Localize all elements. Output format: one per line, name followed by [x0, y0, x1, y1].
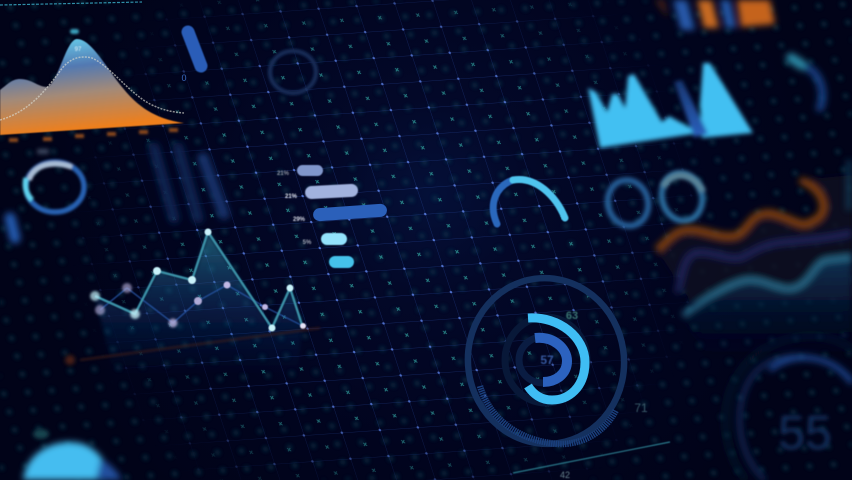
- inner arc: [535, 338, 567, 382]
- bar labels: 29%: [293, 217, 306, 223]
- ring one: [603, 176, 653, 230]
- left ring: [25, 162, 84, 212]
- axis value: 42: [560, 470, 570, 480]
- bar 2: [305, 184, 358, 199]
- ring two: [656, 169, 708, 225]
- bar labels: 5%: [303, 240, 312, 246]
- teal line: [683, 257, 852, 315]
- lower teal axis line: [513, 442, 670, 473]
- wave chart: [657, 175, 852, 380]
- small rings: [603, 169, 708, 230]
- bar 3: [313, 203, 387, 222]
- dashed top line: [0, 2, 142, 5]
- bar labels: [277, 171, 312, 246]
- blurred pills: [10, 148, 224, 238]
- axis markers: [9, 128, 178, 142]
- purple line: [677, 233, 852, 293]
- main donut: [457, 268, 648, 454]
- pill value: 0: [181, 73, 187, 83]
- donut values: 63: [566, 310, 578, 322]
- ring label: [37, 149, 49, 154]
- bottom left donut: [23, 442, 122, 480]
- orange marker: [65, 355, 75, 365]
- ring two highlight: [663, 176, 703, 192]
- gauge arc: [493, 179, 565, 224]
- donut values: 57: [540, 353, 554, 367]
- donut values: 71: [634, 401, 648, 415]
- top right arc: [791, 58, 822, 108]
- gauge value: 55: [778, 407, 832, 460]
- far right glow: [846, 160, 852, 210]
- bar labels: 21%: [277, 171, 290, 177]
- bar 4: [321, 233, 347, 245]
- horizontal bar chart: [277, 165, 387, 268]
- bottom right gauge: [725, 336, 852, 480]
- secondary points: [95, 282, 306, 329]
- chart peak label: 97: [75, 47, 82, 53]
- bar 5: [329, 256, 354, 268]
- line chart: [90, 228, 306, 400]
- cyan histogram: [588, 63, 753, 148]
- data points: [90, 228, 294, 332]
- dark ring: [270, 51, 316, 93]
- blue vertical pill: [188, 32, 201, 66]
- orange base line: [80, 328, 320, 360]
- peak marker: [70, 29, 79, 34]
- outer arc: [528, 318, 585, 400]
- area chart: [0, 39, 184, 135]
- bar 1: [297, 165, 323, 176]
- bar labels: 21%: [285, 194, 298, 200]
- donut values: [540, 310, 648, 415]
- top stacked bars: [655, 0, 775, 30]
- orange line: [657, 180, 823, 250]
- bottom left label: [33, 429, 49, 439]
